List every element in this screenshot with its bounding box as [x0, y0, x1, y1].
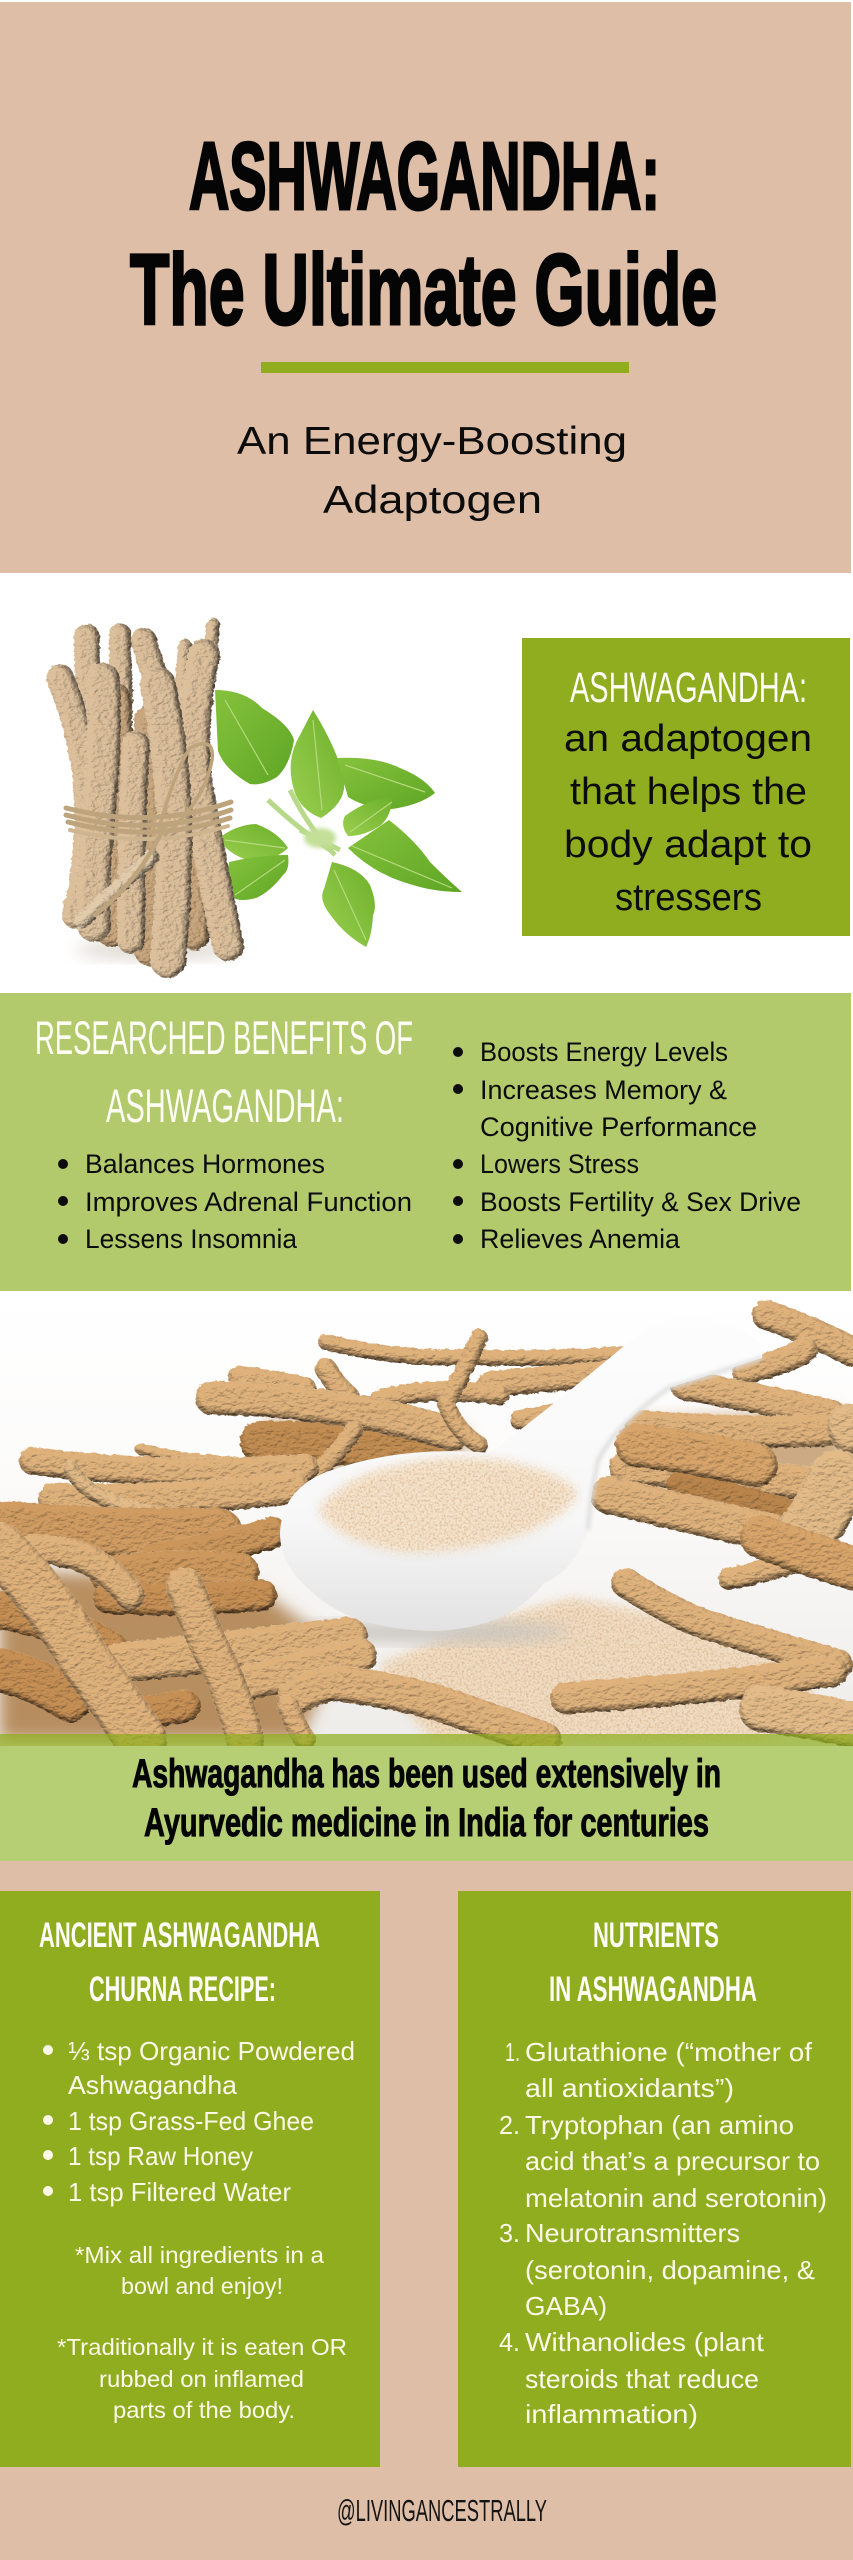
callout: adaptogen definition: an adaptogen [564, 718, 812, 760]
heading: recipe: ANCIENT ASHWAGANDHA [39, 1916, 320, 1955]
callout: adaptogen definition: body adapt to [564, 824, 812, 866]
list: ingredients: ⅓ tsp Organic Powdered [68, 2036, 355, 2066]
recipe notes [57, 2242, 347, 2423]
spoon shadow [290, 1622, 570, 1642]
list: nutrients: inflammation) [525, 2399, 698, 2429]
illustration: bundle of roots tied with twine [60, 625, 235, 960]
list: ingredients: 1 tsp Raw Honey [68, 2141, 253, 2171]
recipe notes: bowl and enjoy! [121, 2273, 283, 2299]
shadow masses beneath the roots [0, 1570, 340, 1740]
powder pile [381, 1598, 816, 1740]
list: benefits left [58, 1149, 412, 1254]
list: nutrients: melatonin and serotonin) [525, 2183, 827, 2213]
heading: recipe: CHURNA RECIPE: [89, 1970, 276, 2009]
divider bar [261, 362, 629, 373]
list: nutrients: 4. [499, 2327, 520, 2357]
list: benefits right: Boosts Fertility & Sex Drive [480, 1187, 801, 1217]
spoon [280, 1318, 762, 1631]
back roots [0, 1315, 853, 1579]
heading: recipe [39, 1916, 320, 2009]
callout: adaptogen definition: that helps the [570, 771, 807, 813]
list: ingredients: 1 tsp Grass-Fed Ghee [68, 2106, 314, 2136]
list: nutrients: steroids that reduce [525, 2364, 759, 2394]
list: benefits left: Balances Hormones [85, 1149, 325, 1179]
list: nutrients: 2. [499, 2110, 520, 2140]
panel: researched benefits [0, 993, 851, 1291]
list: nutrients: acid that’s a precursor to [525, 2146, 820, 2176]
heading: researched benefits [35, 1011, 413, 1132]
subtitle [237, 420, 627, 522]
front roots [0, 1549, 853, 1740]
recipe notes: parts of the body. [113, 2397, 295, 2423]
list: nutrients: GABA) [525, 2291, 607, 2321]
list: nutrients: Withanolides (plant [525, 2327, 765, 2357]
footer handle: @LIVINGANCESTRALLY [337, 2493, 547, 2528]
list: benefits left: Lessens Insomnia [85, 1224, 298, 1254]
list: nutrients: Glutathione (“mother of [525, 2037, 813, 2067]
list: benefits right: Increases Memory & [480, 1075, 727, 1105]
list: nutrients: 1. [505, 2037, 520, 2067]
recipe notes: rubbed on inflamed [99, 2366, 304, 2392]
list: benefits left: Improves Adrenal Function [85, 1187, 412, 1217]
list: nutrients [499, 2037, 827, 2429]
list: nutrients: all antioxidants”) [525, 2073, 734, 2103]
illustration: roots and powder in white spoon [0, 1299, 853, 1746]
heading: nutrients: NUTRIENTS [593, 1916, 719, 1955]
heading: nutrients [549, 1916, 757, 2009]
panel: title header [0, 2, 851, 573]
recipe notes: *Traditionally it is eaten OR [57, 2334, 347, 2360]
panel: churna recipe [0, 1891, 380, 2467]
list: nutrients: Neurotransmitters [525, 2218, 740, 2248]
twine [66, 744, 231, 915]
callout: adaptogen definition: stressers [615, 877, 762, 919]
heading: researched benefits: ASHWAGANDHA: [106, 1079, 344, 1132]
list: ingredients: 1 tsp Filtered Water [68, 2177, 291, 2207]
illustration: ashwagandha leaves [215, 690, 462, 947]
list: ingredients: Ashwagandha [68, 2070, 238, 2100]
list: benefits right: Lowers Stress [480, 1149, 639, 1179]
list: benefits right: Cognitive Performance [480, 1112, 757, 1142]
list: nutrients: (serotonin, dopamine, & [525, 2255, 815, 2285]
title [130, 123, 717, 346]
callout: adaptogen definition [522, 638, 850, 936]
list: nutrients: Tryptophan (an amino [525, 2110, 794, 2140]
list: benefits right: Boosts Energy Levels [480, 1037, 728, 1067]
recipe notes: *Mix all ingredients in a [75, 2242, 324, 2268]
list: ingredients [43, 2036, 355, 2207]
subtitle: An Energy-Boosting [237, 420, 627, 463]
panel: nutrients [458, 1891, 851, 2467]
lower tan background [0, 1861, 853, 2560]
caption band [0, 1734, 853, 1861]
powder in spoon [318, 1458, 578, 1552]
subtitle: Adaptogen [323, 479, 542, 522]
list: benefits right [453, 1037, 801, 1254]
list: nutrients: 3. [499, 2218, 520, 2248]
heading: researched benefits: RESEARCHED BENEFITS OF [35, 1011, 413, 1064]
list: benefits right: Relieves Anemia [480, 1224, 681, 1254]
